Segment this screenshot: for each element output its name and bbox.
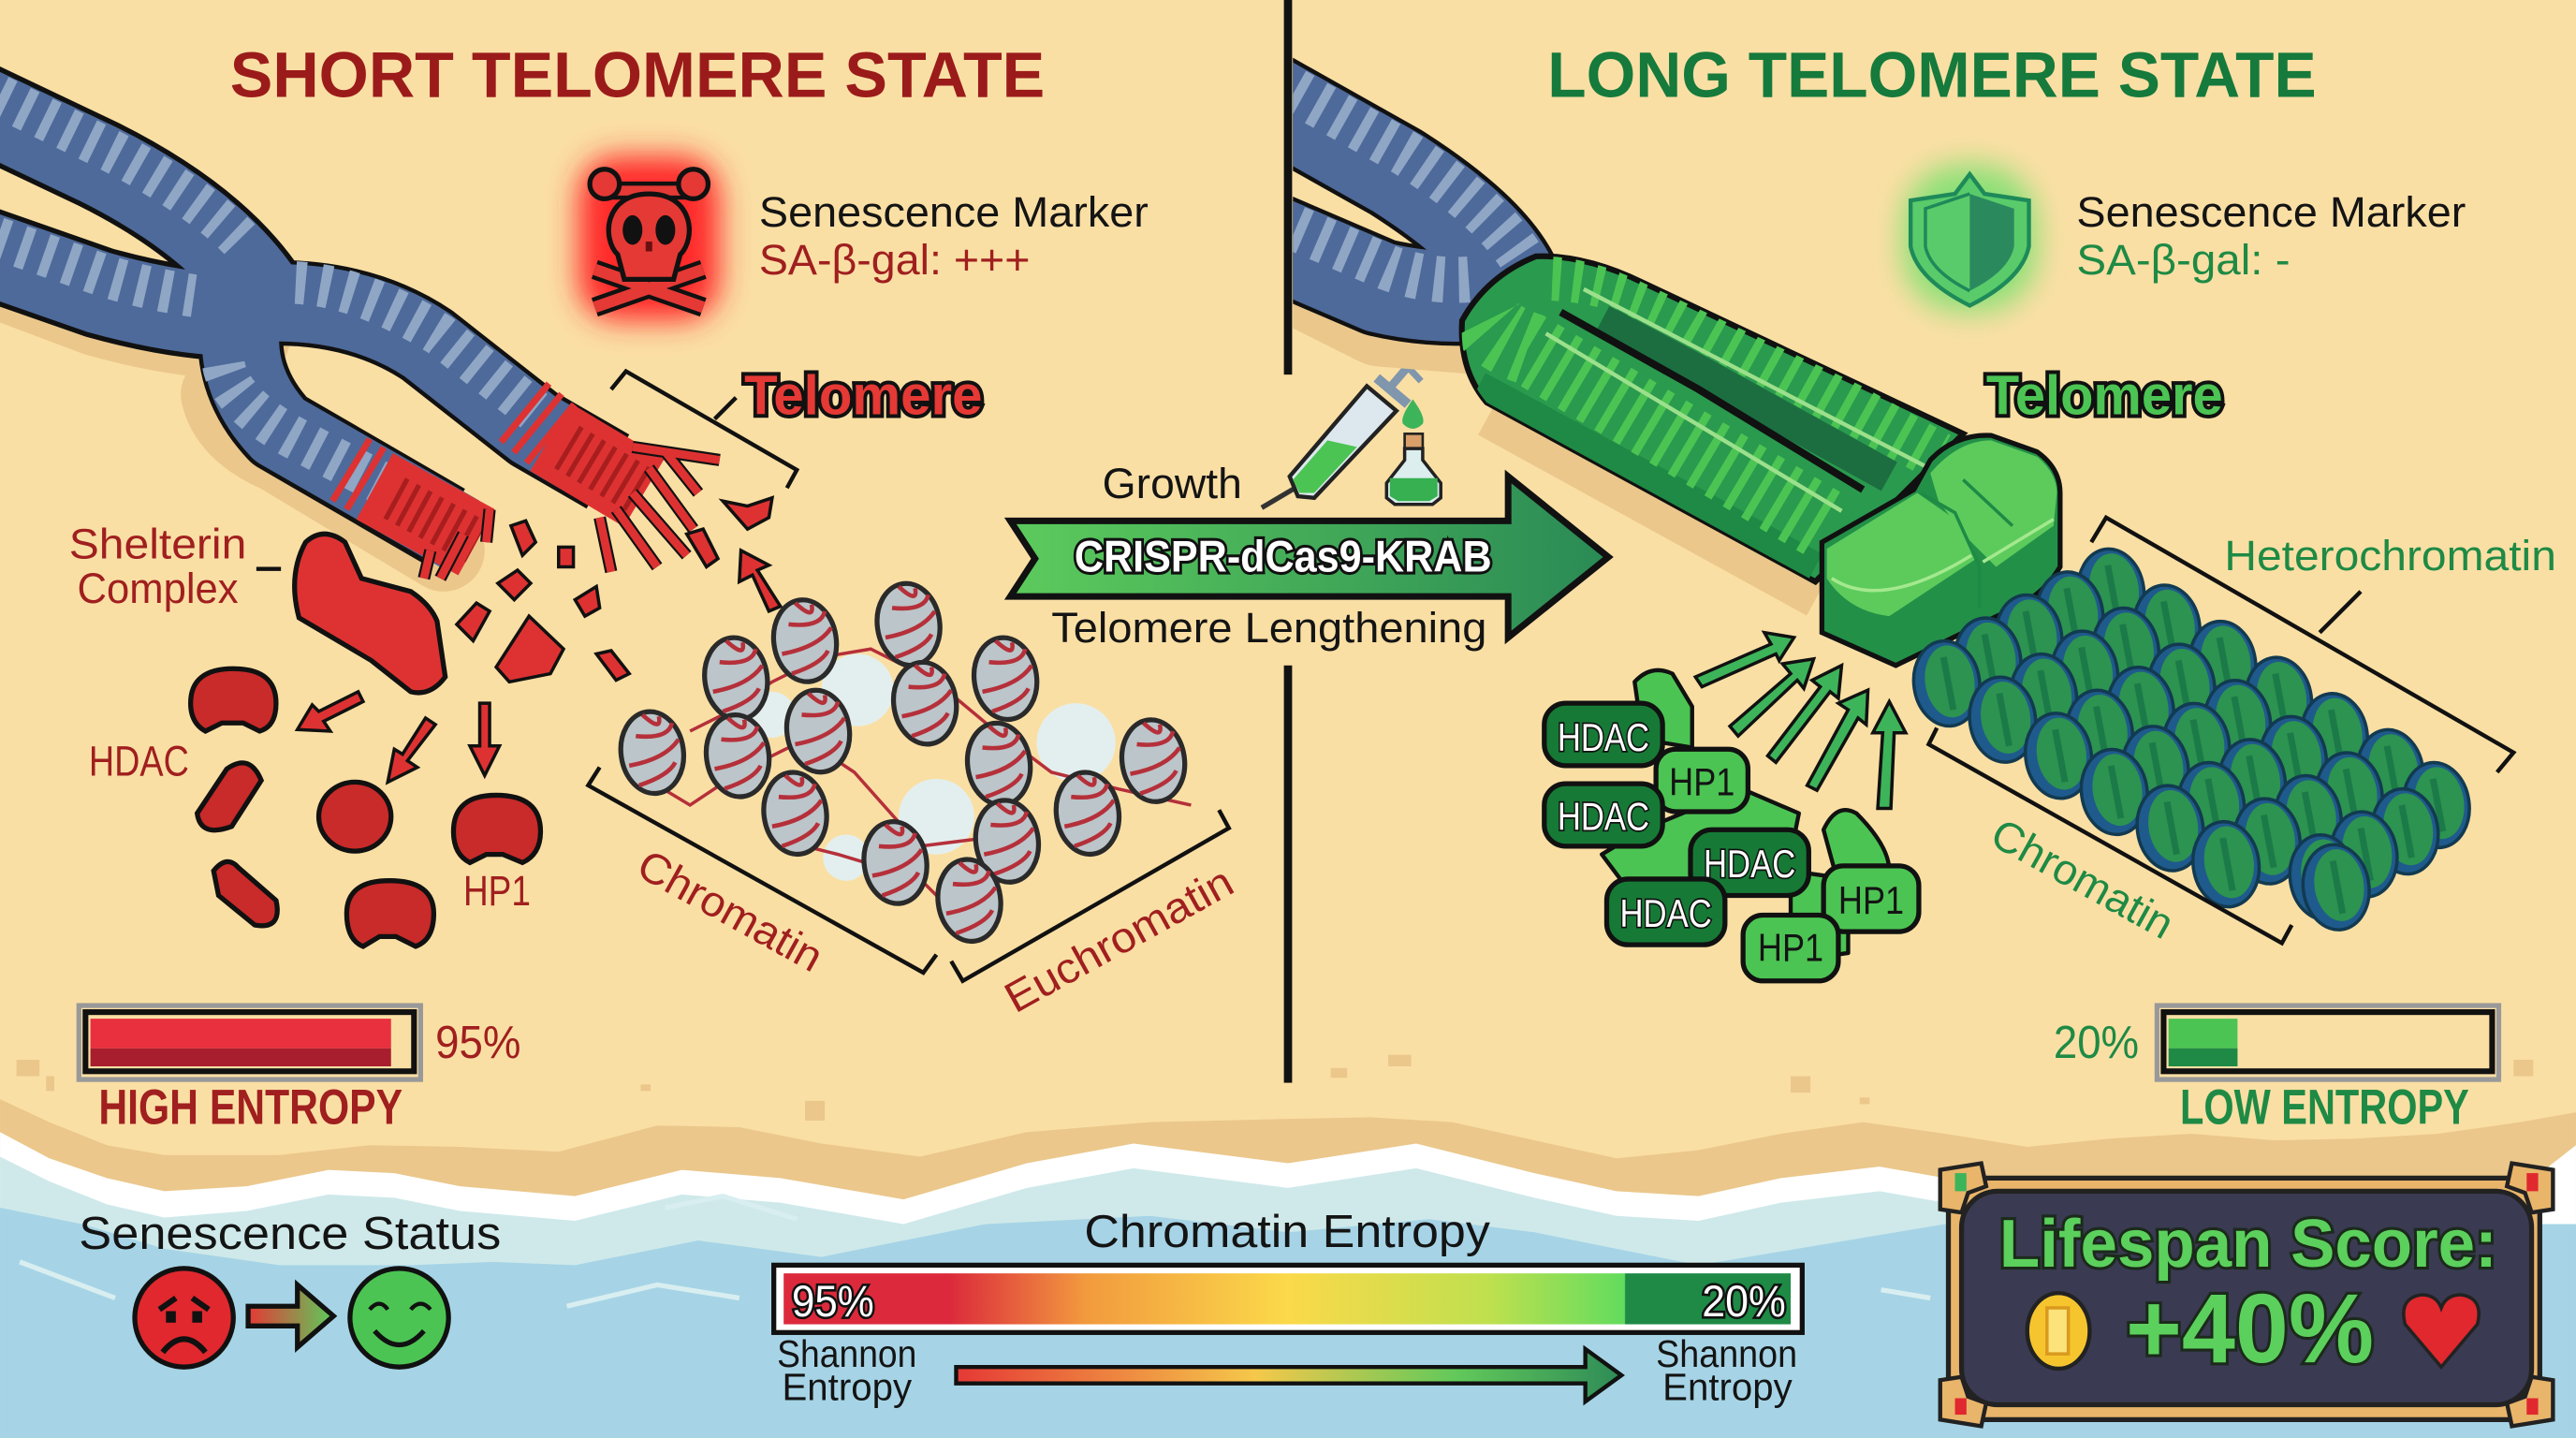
water ripples	[20, 1196, 1930, 1306]
background: wet sand band	[0, 1099, 2576, 1438]
text: 20%: 20%	[2054, 1018, 2139, 1068]
label: shelterin complex	[69, 521, 281, 612]
text: shannon entropy left	[777, 1332, 916, 1408]
green tube details	[1479, 276, 1945, 566]
text: 95%: 95%	[435, 1018, 520, 1068]
label: heterochromatin: Heterochromatin	[2224, 532, 2556, 580]
text: high entropy: HIGH ENTROPY	[98, 1079, 402, 1135]
label: telomere red: Telomere	[744, 363, 983, 426]
chromosome: long telomere	[1265, 79, 1963, 600]
telomere cap	[1822, 435, 2060, 666]
icon: shield	[1902, 165, 2037, 312]
shelterin protein	[295, 534, 446, 693]
bracket: heterochromatin	[2091, 518, 2513, 772]
label: shelterin complex: Shelterin	[69, 521, 246, 568]
text: senescence marker long: Senescence Marker	[2076, 188, 2466, 236]
label: euchromatin: Euchromatin	[997, 858, 1241, 1022]
protein: HDAC 4	[1606, 879, 1725, 945]
red damaged tip: lower arm	[348, 468, 476, 542]
text: telomere lengthening: Telomere Lengthening	[1051, 604, 1486, 652]
protein: HDAC 2: HDAC	[1558, 794, 1649, 838]
red damaged tip: upper arm	[522, 411, 644, 493]
proteins: HDAC and HP1 fragments	[191, 668, 540, 946]
labels: HDAC HP1: HDAC	[89, 737, 189, 785]
icon: coin	[2027, 1293, 2089, 1369]
protein: HP1 3: HP1	[1758, 926, 1823, 970]
protein: HP1 2: HP1	[1838, 878, 1904, 922]
label: telomere green: Telomere	[1986, 363, 2223, 426]
chromosome: short telomere	[0, 85, 644, 550]
text: +40%: +40%	[2126, 1274, 2374, 1384]
green arrows	[1695, 633, 1906, 808]
entropy bar: high	[79, 1005, 420, 1079]
heading: chromatin entropy: Chromatin Entropy	[1084, 1207, 1490, 1257]
arrow banner: CRISPR	[1010, 477, 1608, 638]
shannon gradient arrow	[956, 1349, 1621, 1401]
text: shannon entropy right	[1656, 1332, 1797, 1408]
nucleosomes: compact heterochromatin	[1909, 545, 2475, 934]
chromatin entropy gradient bar	[774, 1265, 1802, 1332]
text: low entropy: LOW ENTROPY	[2180, 1079, 2469, 1135]
panel: lifespan score	[1940, 1164, 2553, 1426]
text: senescence marker long: SA-β-gal: -	[2076, 236, 2291, 284]
text: senescence marker short: Senescence Marker	[759, 188, 1149, 236]
icon: skull senescence marker	[578, 156, 720, 320]
icon: happy face	[350, 1269, 448, 1367]
sand specks	[17, 1055, 2533, 1121]
green tube body	[1462, 257, 1963, 581]
protein: HP1 1: HP1	[1669, 759, 1734, 803]
text: growth: Growth	[1103, 460, 1242, 507]
icon: syringe	[1262, 357, 1421, 507]
labels: HDAC HP1: HP1	[463, 867, 531, 915]
nucleosomes: open euchromatin	[616, 580, 1191, 946]
protein: HP1 3	[1743, 916, 1838, 981]
bracket: chromatin long	[1928, 727, 2291, 943]
frayed telomere strands	[424, 447, 720, 579]
debris fragments	[457, 498, 772, 682]
text: senescence marker short: SA-β-gal: +++	[759, 236, 1030, 284]
protein: HDAC 1	[1544, 703, 1662, 766]
text: shannon entropy left: Entropy	[782, 1365, 913, 1408]
protein: HDAC 1: HDAC	[1558, 715, 1649, 759]
background: shallow water	[0, 1157, 2576, 1438]
icon: heart	[2404, 1295, 2479, 1367]
protein: HDAC 2	[1544, 784, 1662, 846]
frame gems	[1955, 1173, 2539, 1415]
protein: HP1 2	[1823, 866, 1919, 932]
label: chromatin short: Chromatin	[630, 841, 831, 981]
green tube shadow	[1486, 419, 1815, 600]
text: shannon entropy right: Shannon	[1656, 1332, 1797, 1375]
text: lifespan score: Lifespan Score:	[1999, 1207, 2497, 1282]
bracket: euchromatin	[951, 810, 1229, 981]
text: shannon entropy right: Entropy	[1662, 1365, 1793, 1408]
text: senescence marker long	[2076, 188, 2466, 284]
label: shelterin complex: Complex	[78, 565, 239, 612]
entropy bar: low	[2157, 1005, 2498, 1079]
bracket: chromatin short	[588, 768, 936, 973]
icon: drop	[1402, 399, 1424, 429]
blue arms	[1265, 79, 1519, 329]
label: chromatin long: Chromatin	[1983, 809, 2182, 948]
background: white foam	[0, 1132, 2576, 1438]
protein: HDAC 3: HDAC	[1704, 842, 1795, 886]
chromatin entropy gradient bar: 95%	[792, 1277, 874, 1327]
text: senescence marker short	[759, 188, 1149, 284]
background: water	[0, 1208, 2576, 1438]
protein blobs behind labels	[1602, 670, 1889, 961]
protein: HDAC 4: HDAC	[1620, 891, 1712, 935]
frame corner ornaments	[1940, 1164, 2553, 1426]
vertical divider	[1284, 0, 1292, 1083]
heading: senescence status: Senescence Status	[79, 1209, 501, 1259]
title: long telomere state: LONG TELOMERE STATE	[1547, 39, 2317, 111]
title: short telomere state: SHORT TELOMERE STATE	[230, 39, 1045, 111]
text: CRISPR-dCas9-KRAB: CRISPR-dCas9-KRAB	[1075, 533, 1492, 582]
labels: HDAC HP1	[89, 737, 531, 915]
telomere bracket: short	[611, 372, 797, 488]
red arrows	[298, 550, 781, 782]
icon: sad face	[135, 1269, 233, 1367]
icon: flask	[1386, 433, 1441, 505]
text: shannon entropy left: Shannon	[777, 1332, 916, 1375]
chromatin entropy gradient bar: 20%	[1702, 1277, 1786, 1327]
protein: HP1 1	[1656, 749, 1748, 812]
protein: HDAC 3	[1690, 829, 1808, 895]
icon: status arrow	[248, 1284, 333, 1347]
